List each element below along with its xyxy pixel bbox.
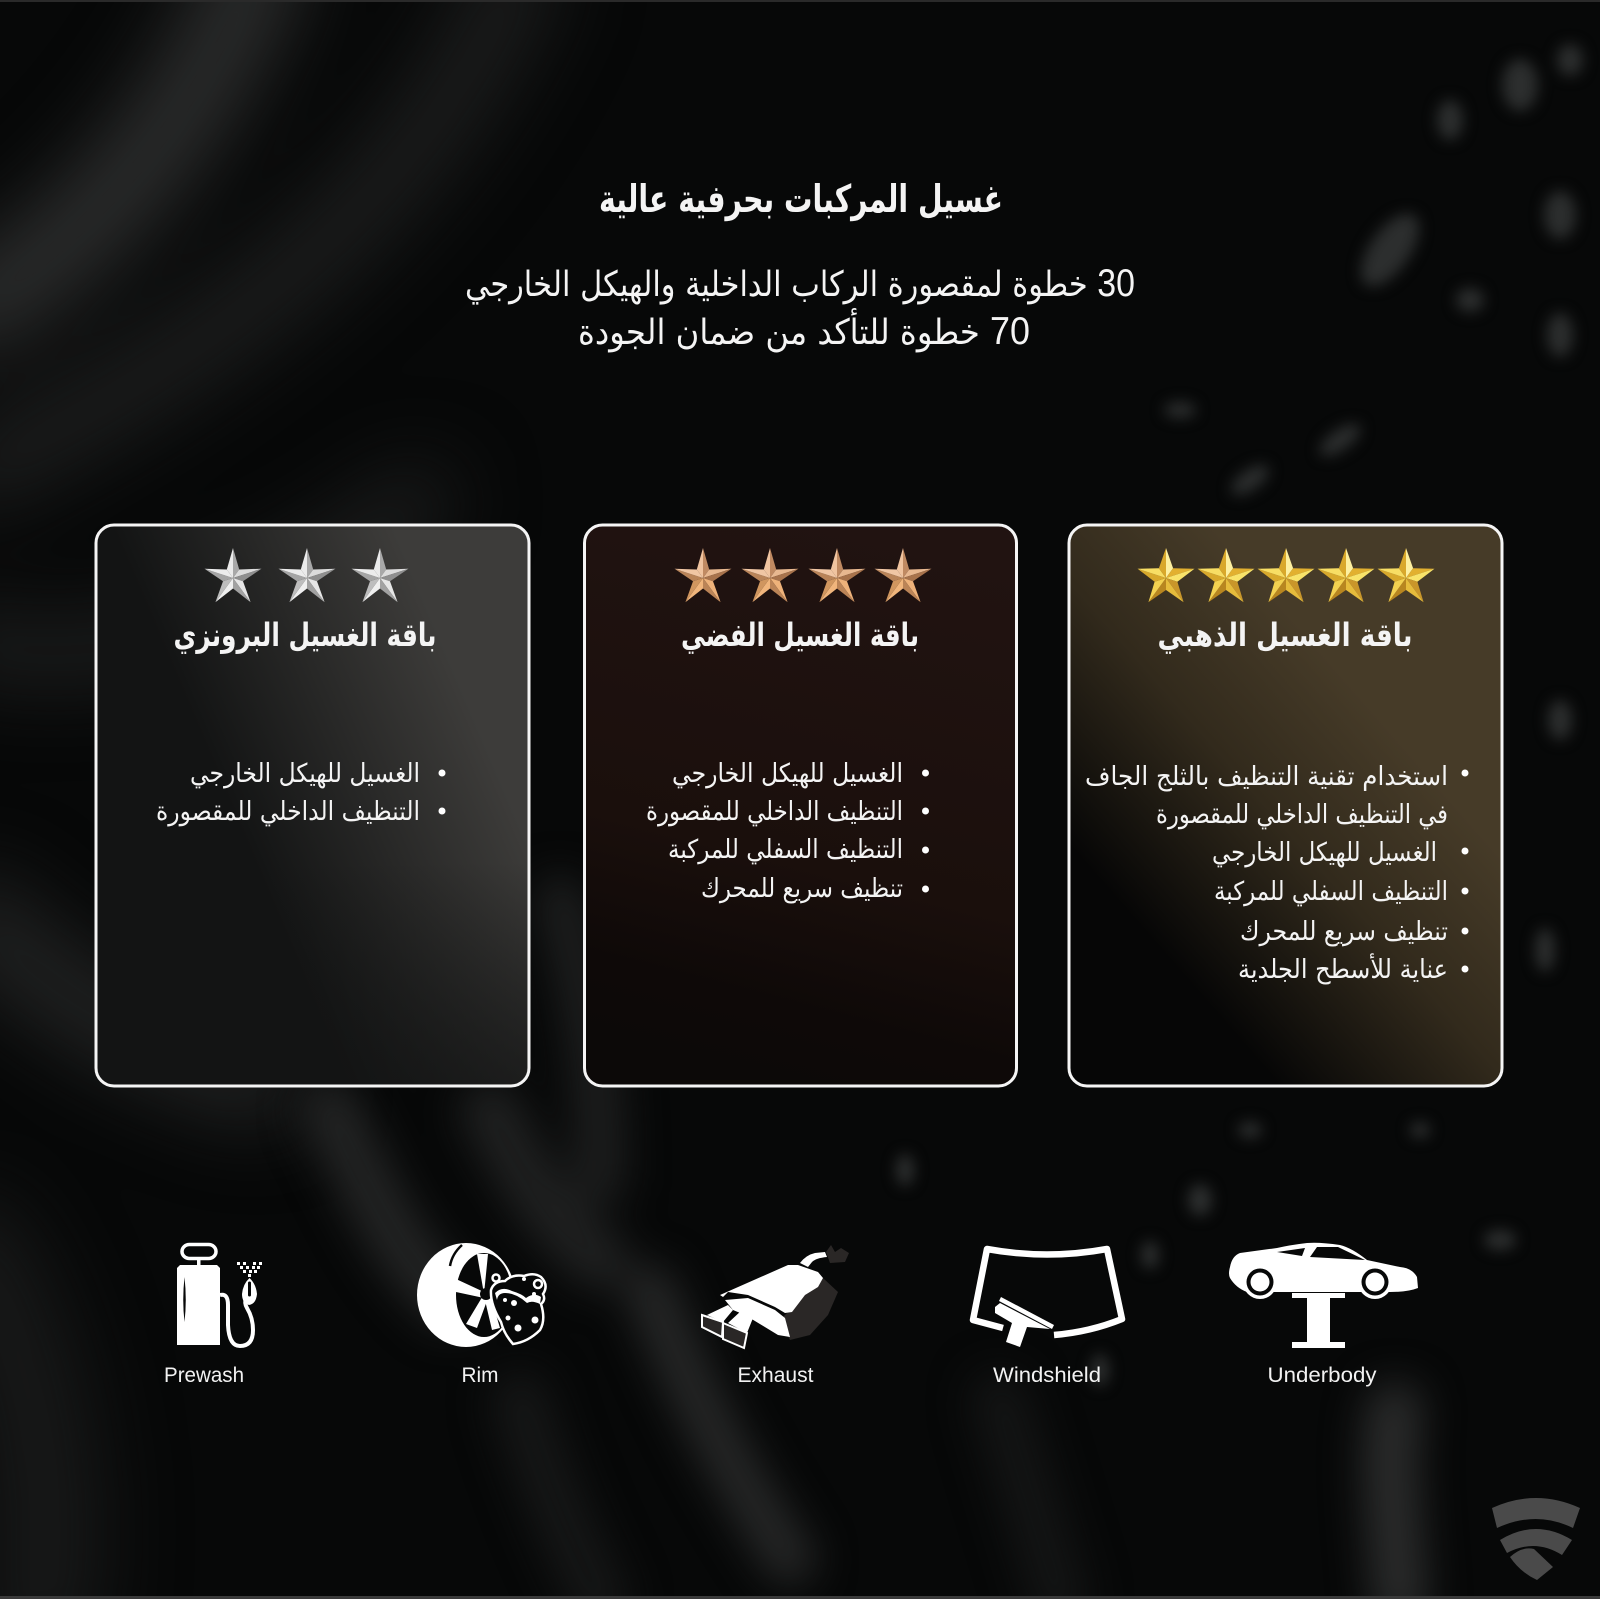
heading: bronze: باقة الغسيل البرونزي xyxy=(174,616,436,654)
list: gold features: في التنظيف الداخلي للمقصورة xyxy=(1156,800,1448,830)
list: silver features: التنظيف السفلي للمركبة xyxy=(668,835,903,865)
list: gold features: التنظيف السفلي للمركبة xyxy=(1214,877,1448,907)
panel: silver package xyxy=(584,525,1016,1086)
icon: prewash sprayer xyxy=(177,1244,262,1346)
label: rim: Rim xyxy=(462,1364,498,1387)
heading: gold: باقة الغسيل الذهبي xyxy=(1158,616,1412,654)
icon: brand shield logo xyxy=(1492,1498,1580,1580)
list: gold features: استخدام تقنية التنظيف بالثلج الجاف xyxy=(1085,762,1448,792)
list: bronze features xyxy=(156,759,446,827)
icon: windshield with wiper xyxy=(973,1249,1122,1347)
label: prewash: Prewash xyxy=(164,1364,244,1387)
subtitle xyxy=(465,262,1135,353)
list: silver features: تنظيف سريع للمحرك xyxy=(701,874,903,904)
panel: bronze package xyxy=(96,525,529,1086)
subtitle: 70 خطوة للتأكد من ضمان الجودة xyxy=(578,308,1030,353)
list: bronze features: التنظيف الداخلي للمقصورة xyxy=(156,797,420,827)
label: exhaust: Exhaust xyxy=(738,1364,814,1387)
list: silver features xyxy=(646,759,929,904)
list: gold features xyxy=(1085,762,1468,985)
icon: car on lift xyxy=(1229,1243,1418,1348)
label: windshield: Windshield xyxy=(993,1364,1101,1387)
icon: exhaust muffler xyxy=(702,1245,849,1348)
panel: gold package xyxy=(1069,525,1502,1086)
list: bronze features: الغسيل للهيكل الخارجي xyxy=(190,759,420,789)
heading: silver: باقة الغسيل الفضي xyxy=(681,616,919,654)
subtitle: 30 خطوة لمقصورة الركاب الداخلية والهيكل الخارجي xyxy=(465,262,1135,305)
list: gold features: تنظيف سريع للمحرك xyxy=(1240,917,1448,947)
title: غسيل المركبات بحرفية عالية xyxy=(599,177,1003,221)
stars: three silver xyxy=(204,548,408,602)
stars: five gold xyxy=(1138,548,1434,602)
list: gold features: عناية للأسطح الجلدية xyxy=(1238,952,1448,985)
label: underbody: Underbody xyxy=(1268,1364,1377,1387)
icon: rim and sponge xyxy=(417,1243,546,1347)
stars: four bronze xyxy=(674,548,932,602)
list: silver features: التنظيف الداخلي للمقصورة xyxy=(646,797,903,827)
list: silver features: الغسيل للهيكل الخارجي xyxy=(672,759,903,789)
list: gold features: الغسيل للهيكل الخارجي xyxy=(1212,838,1437,868)
